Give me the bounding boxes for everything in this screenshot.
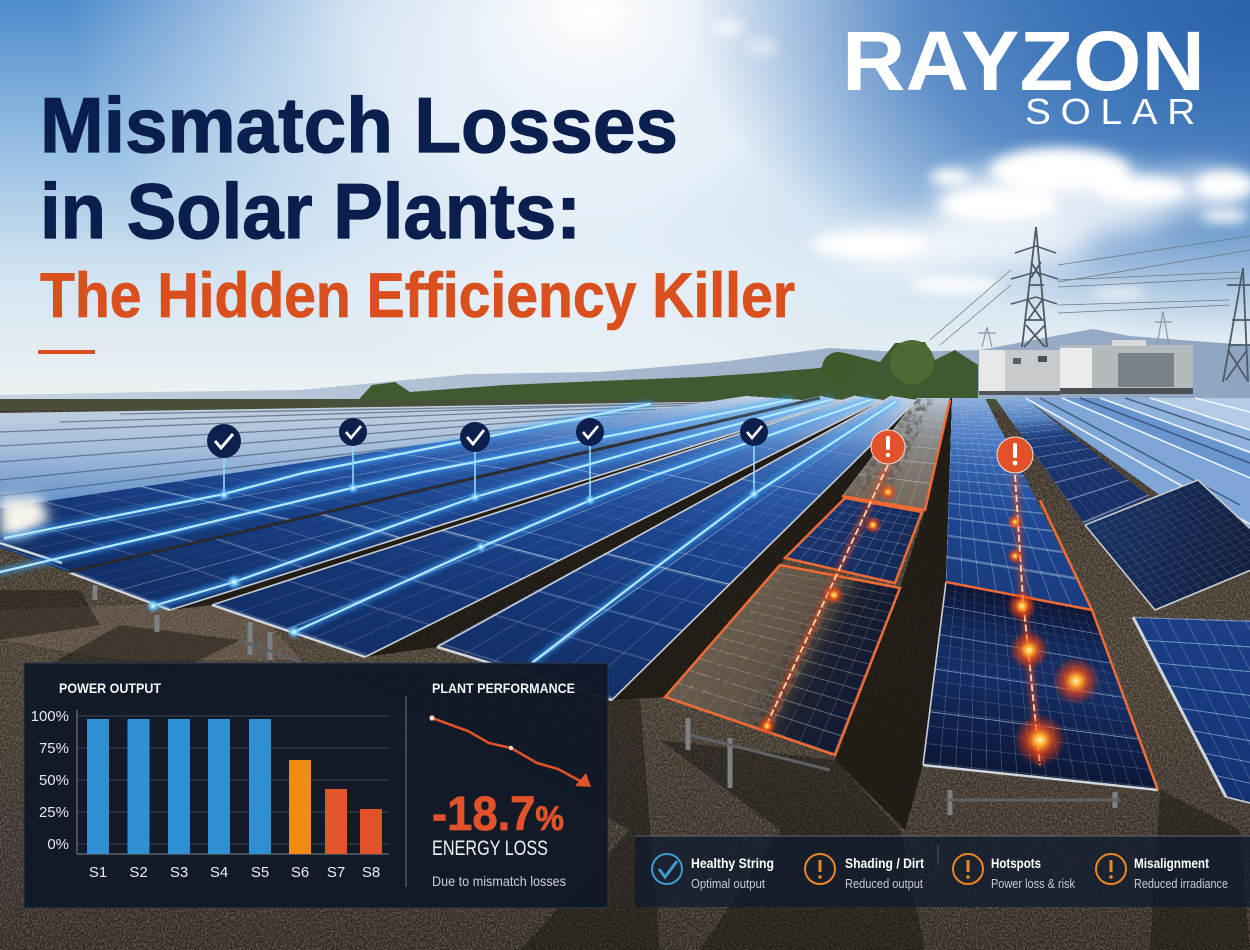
building: inverter container [979, 350, 1060, 395]
marker: healthy check 2 [339, 418, 367, 494]
dirt texture on shaded panels [668, 399, 935, 735]
legend: shading and dirt: Shading / Dirt [845, 856, 924, 871]
bar chart: power output: 0% [47, 836, 69, 853]
healthy row 1 [0, 396, 803, 572]
title: Mismatch Losses [40, 81, 678, 169]
legend: hotspots: Hotspots [991, 856, 1041, 871]
orange fault lines and hotspots [758, 465, 1100, 766]
legend: hotspots [953, 854, 1076, 891]
stat: energy loss: ENERGY LOSS [432, 837, 548, 860]
orange outlines of faulty panels [665, 400, 1158, 790]
misaligned tilted panel [1085, 480, 1250, 610]
logo: SOLAR [1025, 91, 1205, 132]
far solar rows on the right [1025, 398, 1250, 560]
bar chart: power output: S3 [170, 864, 188, 881]
legend: hotspots: Power loss & risk [991, 877, 1076, 891]
healthy row 2 [68, 396, 840, 610]
bar chart: power output: S2 [129, 864, 148, 881]
dark gaps between rows [170, 396, 952, 830]
bar chart: power output: 100% [31, 708, 69, 725]
legend: misalignment: Reduced irradiance [1134, 877, 1228, 891]
title: The Hidden Efficiency Killer [40, 261, 795, 331]
fault marker: hotspot row [997, 437, 1033, 473]
ground [0, 396, 1250, 950]
stat: energy loss: -18.7% [432, 788, 564, 841]
panel: dashboard [24, 663, 608, 908]
bar chart: power output: S5 [251, 864, 269, 881]
legend: healthy string [652, 854, 774, 891]
legend: misalignment: Misalignment [1134, 856, 1209, 871]
building: transformer station [1060, 340, 1193, 394]
tree line [360, 340, 978, 400]
far solar rows on the left [0, 399, 880, 510]
bar chart: power output: 50% [39, 772, 69, 789]
title: in Solar Plants: [40, 167, 581, 255]
dirty row: far section [842, 398, 950, 510]
hotspot row: far section [946, 398, 1092, 610]
clouds [712, 20, 1250, 297]
shadows on the ground [0, 590, 1250, 950]
legend: healthy string: Optimal output [691, 877, 765, 891]
lower right panel [1133, 617, 1250, 840]
fault marker: dirty row [871, 430, 905, 464]
bar chart: power output: 75% [39, 740, 69, 757]
legend: shading and dirt [805, 854, 924, 891]
row frames and supports [0, 396, 1250, 815]
marker: healthy check 4 [576, 418, 604, 506]
sun glare on the far left row [0, 497, 50, 537]
blue healthy string lines [0, 400, 895, 662]
stat: energy loss: Due to mismatch losses [432, 873, 566, 889]
mountains [0, 329, 1250, 400]
bar chart: power output: S7 [327, 864, 345, 881]
dirty row: near section [665, 565, 900, 755]
line chart: plant performance [429, 680, 591, 787]
bar chart: power output: POWER OUTPUT [59, 680, 161, 696]
bar chart: power output: 25% [39, 804, 69, 821]
stat: energy loss [432, 788, 566, 889]
marker: healthy check 5 [740, 418, 768, 500]
power pylons and wires [930, 227, 1250, 382]
healthy row 3 [212, 396, 882, 657]
legend: healthy string: Healthy String [691, 856, 774, 871]
panel: legend [635, 836, 1250, 907]
bar chart: power output: S6 [291, 864, 309, 881]
line chart: plant performance: PLANT PERFORMANCE [432, 680, 575, 696]
title [40, 81, 795, 331]
logo: RAYZON [842, 14, 1205, 108]
healthy markers [207, 418, 768, 506]
dirty row: middle section [785, 498, 922, 583]
marker: healthy check 3 [460, 422, 490, 503]
bar chart: power output: S1 [89, 864, 107, 881]
horizon band [0, 399, 1250, 413]
bar chart: power output: S4 [210, 864, 228, 881]
right row, shaded section [995, 398, 1150, 525]
bar chart: power output [31, 680, 389, 881]
hotspot row: near section [923, 582, 1158, 790]
legend: misalignment [1096, 854, 1228, 891]
bar chart: power output: S8 [362, 864, 380, 881]
healthy row 4 [437, 396, 917, 700]
marker: healthy check 1 [207, 424, 241, 501]
legend: shading and dirt: Reduced output [845, 877, 923, 891]
title accent bar [38, 350, 95, 354]
